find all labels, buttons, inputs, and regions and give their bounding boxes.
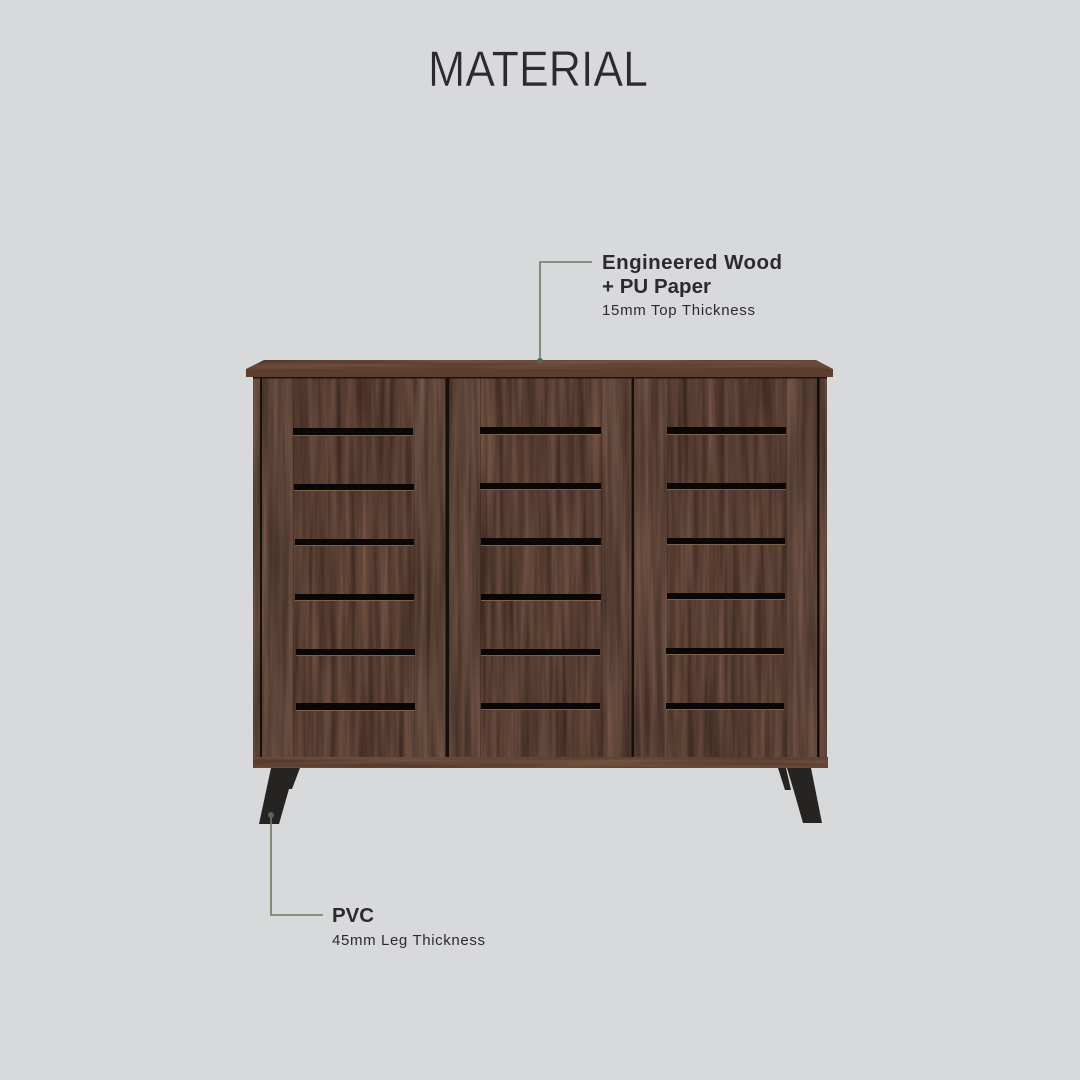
door stiles [253, 377, 827, 758]
leader dot: top [537, 358, 543, 364]
leader line: top [540, 262, 592, 361]
slat highlights [293, 434, 786, 711]
cabinet illustration [246, 360, 833, 824]
door slats: centre [480, 427, 601, 709]
top front edge [246, 369, 833, 377]
callout: pvc [268, 812, 485, 949]
back legs [778, 768, 791, 790]
door slats: left [293, 428, 415, 710]
carcass [253, 377, 827, 758]
door slats: right [666, 427, 786, 709]
label: material name second line: + PU Paper [602, 275, 711, 298]
label: pvc: PVC [332, 904, 374, 927]
label: material name: Engineered Wood [602, 251, 782, 274]
top surface [246, 360, 833, 369]
leader line: leg [271, 815, 323, 915]
stile edges [293, 378, 787, 757]
door gaps [260, 377, 820, 758]
leader dot: leg [268, 812, 274, 818]
label: top thickness: 15mm Top Thickness [602, 302, 755, 319]
top edge shadow [253, 377, 827, 378]
callout: engineered wood [537, 251, 782, 364]
label: leg thickness: 45mm Leg Thickness [332, 932, 485, 949]
base plinth [253, 757, 828, 768]
icon: left leg [259, 768, 300, 824]
title: MATERIAL [428, 41, 648, 97]
icon: right leg [787, 768, 822, 823]
